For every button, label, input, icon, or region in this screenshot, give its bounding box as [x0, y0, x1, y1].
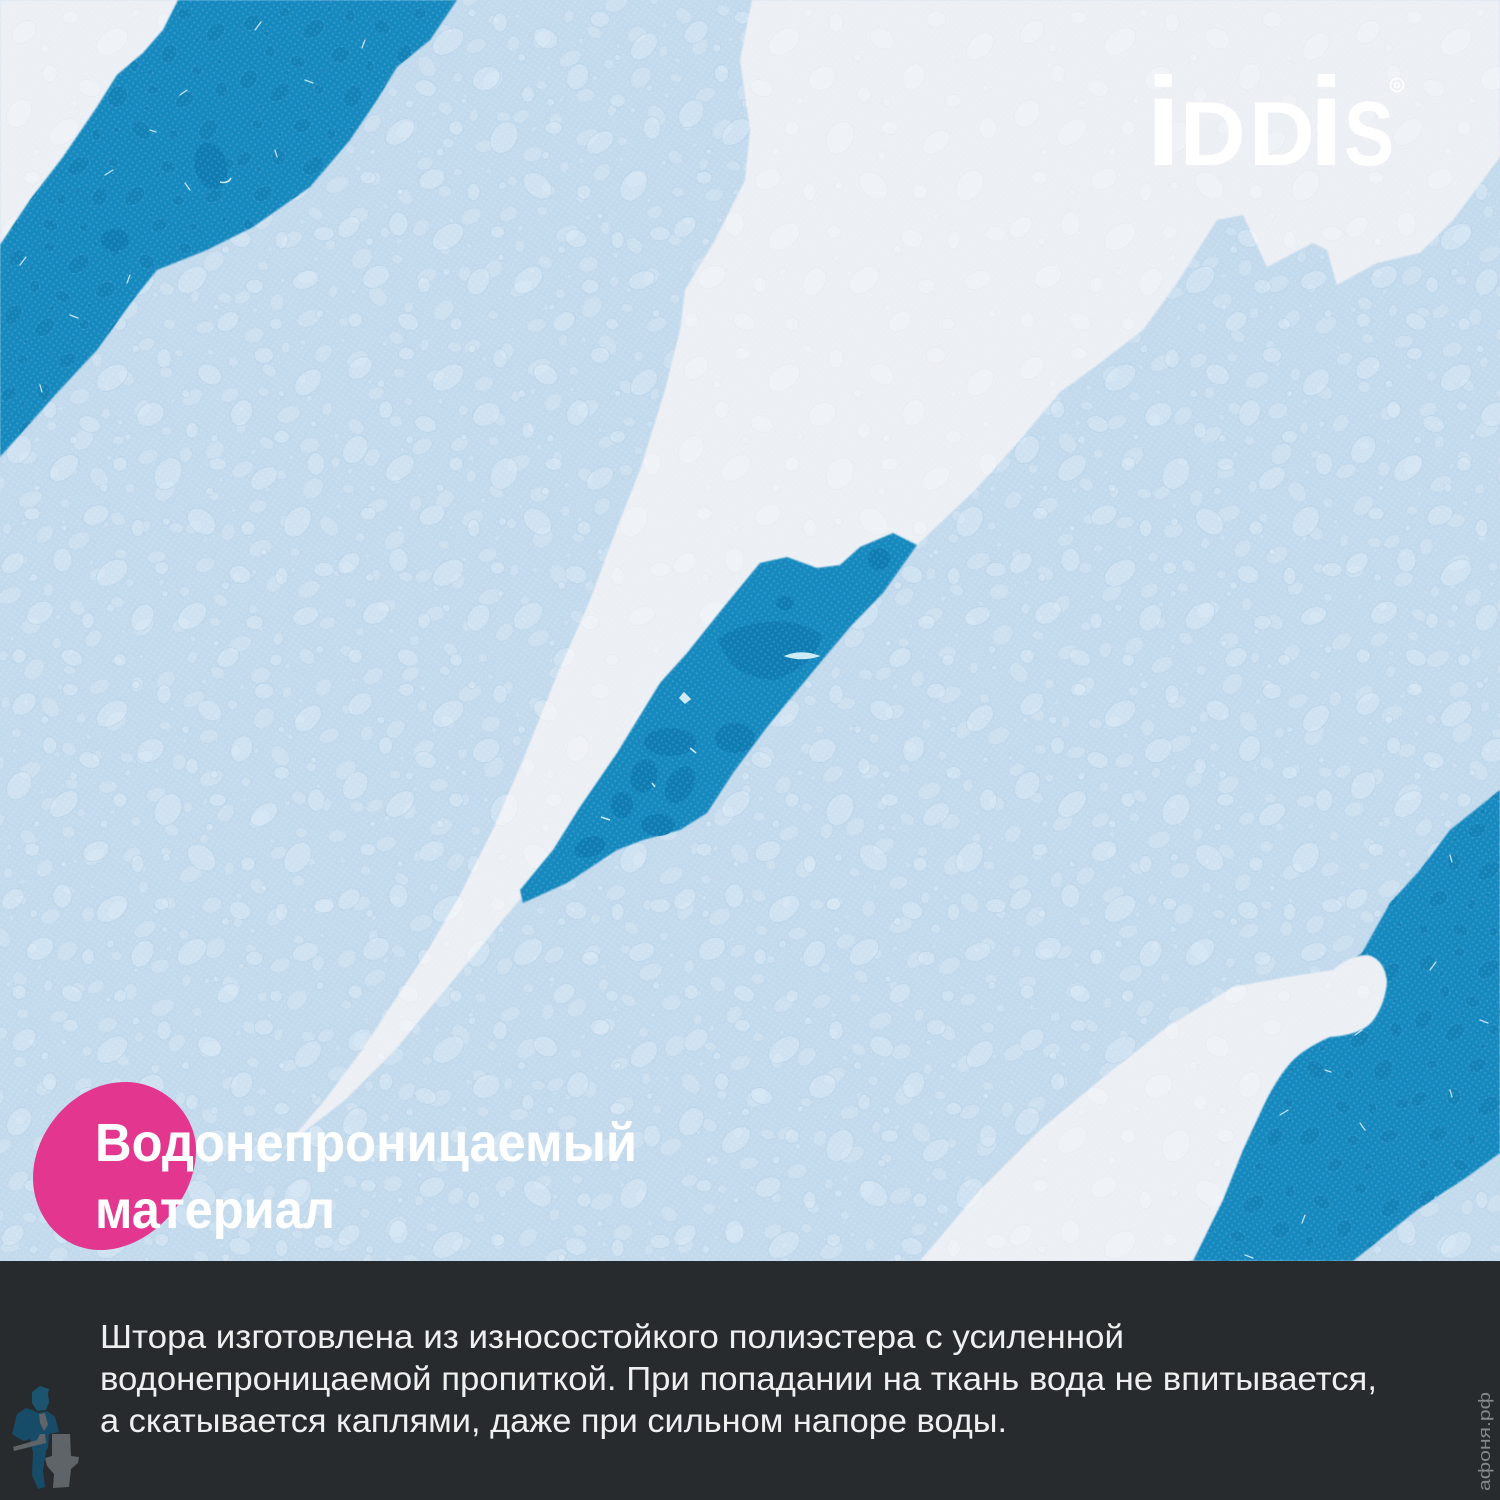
large drop on the top-left blue shape — [101, 139, 233, 251]
logo: IDDIS: D — [1249, 84, 1315, 185]
blue fabric shape: centre — [520, 533, 917, 903]
heading: Водонепроницаемый — [95, 1113, 637, 1173]
white fabric shape: top left — [0, 0, 180, 245]
logo: IDDIS: D — [1180, 84, 1246, 185]
icon: plumber with toilet — [12, 1386, 79, 1489]
body text: а скатывается каплями, даже при сильном напоре воды. — [100, 1403, 1007, 1440]
body text: Штора изготовлена из износостойкого полиэстера с усиленной — [100, 1319, 1124, 1356]
logo: IDDIS: i — [1146, 53, 1181, 192]
white fabric shape: bottom right — [920, 955, 1387, 1261]
logo registered mark — [1390, 78, 1404, 92]
white fabric shape: centre — [282, 0, 1500, 1150]
large drops on the central blue shape — [572, 548, 890, 862]
logo: IDDIS: i — [1309, 53, 1344, 192]
pink blob behind heading — [33, 1082, 196, 1250]
watermark: site name: афоня.рф — [1476, 1392, 1494, 1491]
logo: IDDIS: S — [1344, 84, 1394, 185]
dark footer panel — [0, 1261, 1500, 1500]
blue fabric shape: bottom right — [1190, 790, 1500, 1261]
heading: материал — [95, 1180, 335, 1240]
body text: водонепроницаемой пропиткой. При попадании на ткань вода не впитывается, — [100, 1361, 1377, 1398]
blue fabric shape: top left — [0, 0, 457, 457]
